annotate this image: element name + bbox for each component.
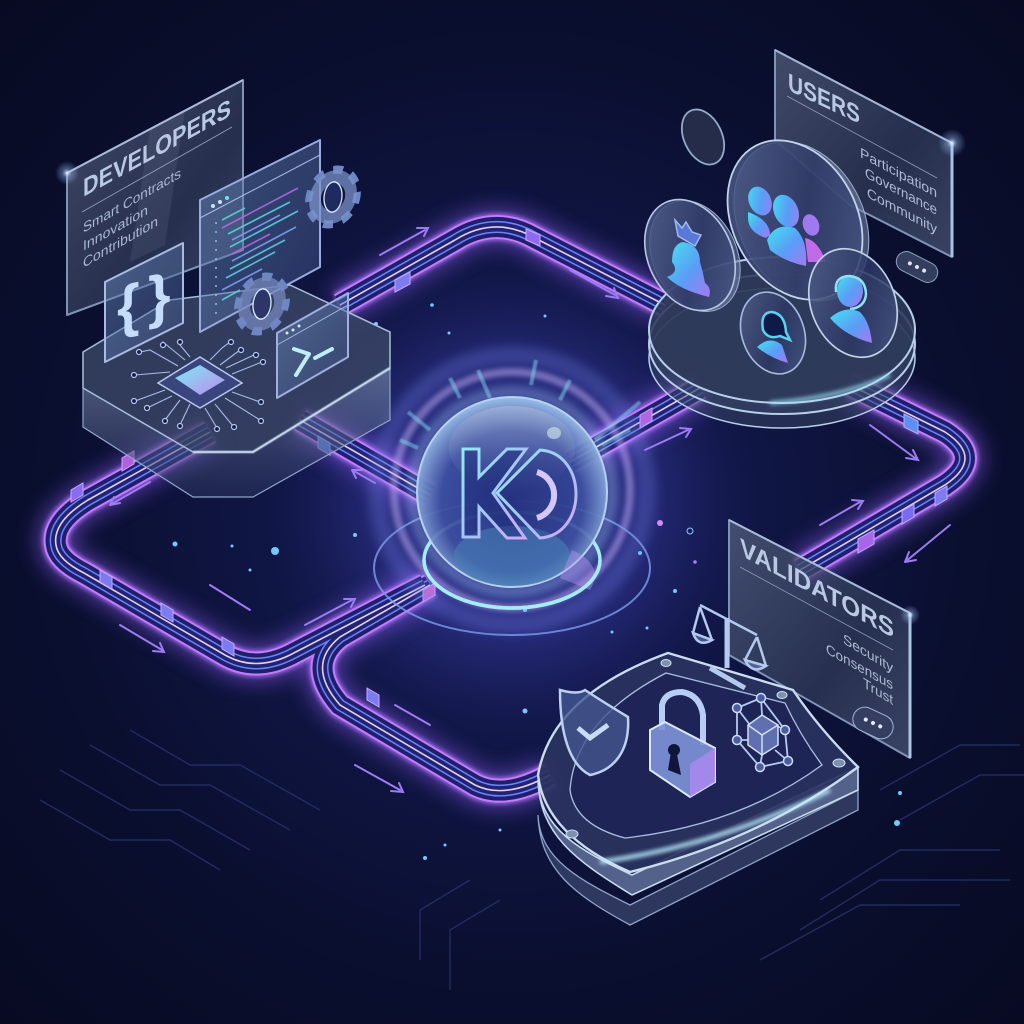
sphere (417, 397, 607, 587)
small floating disc (674, 103, 732, 171)
title: validators: VALIDATORS (740, 533, 894, 644)
developers base side (83, 368, 390, 497)
base rim light (193, 368, 390, 452)
text: community: Community (867, 185, 937, 238)
developers station (55, 80, 390, 497)
sphere glow (412, 392, 612, 592)
community icon (744, 183, 826, 266)
headset disc (793, 235, 913, 371)
validators station (538, 520, 920, 925)
crown disc (627, 183, 757, 328)
code window panel (200, 140, 320, 332)
users pill button (893, 248, 941, 286)
sphere base (454, 526, 570, 586)
gear lower (238, 272, 286, 336)
connecting light routes (56, 227, 965, 791)
shield base highlight (600, 790, 830, 862)
text: participation: Participation (860, 145, 937, 202)
text: smart contracts: Smart Contracts (83, 165, 181, 237)
large community disc (701, 114, 895, 327)
users label panel (775, 50, 966, 257)
text: governance: Governance (865, 165, 937, 219)
terminal panel (277, 293, 348, 398)
sphere highlight (449, 406, 575, 490)
woman disc (730, 283, 816, 383)
validators pill button (849, 703, 897, 743)
text: innovation: Innovation (83, 202, 148, 255)
text: security: Security (843, 631, 893, 677)
processor chip (132, 340, 266, 432)
developers base top (83, 285, 390, 452)
braces panel (105, 243, 183, 362)
users station (627, 50, 966, 428)
shield check icon (560, 690, 628, 775)
left brace: { (117, 272, 140, 341)
KD logo (463, 449, 576, 538)
route data packets (71, 229, 947, 707)
stacked disc base (649, 257, 915, 428)
title: users: USERS (788, 67, 860, 130)
text: trust: Trust (863, 675, 894, 709)
gear upper (303, 158, 363, 236)
scales of justice (693, 605, 766, 688)
front ring arc (424, 560, 600, 608)
halo rings (374, 355, 650, 635)
bright ring behind sphere (424, 512, 600, 608)
route direction arrows (110, 228, 950, 792)
developers label panel (55, 80, 243, 315)
circuit traces background (40, 730, 1024, 990)
shield base lower layers (538, 790, 858, 925)
network cube icon (732, 694, 792, 772)
scattered light particles (172, 303, 902, 860)
padlock icon (650, 692, 715, 797)
shield base rivets (566, 660, 845, 838)
text: contribution: Contribution (83, 213, 158, 272)
text: consensus: Consensus (826, 641, 893, 694)
shield base top (538, 653, 858, 872)
title: developers: DEVELOPERS (83, 93, 231, 203)
central sphere with KD logo (374, 355, 650, 635)
validators label panel (729, 520, 920, 758)
right brace: } (148, 262, 171, 331)
disc rim glow (770, 375, 890, 403)
centre glow (267, 255, 757, 745)
